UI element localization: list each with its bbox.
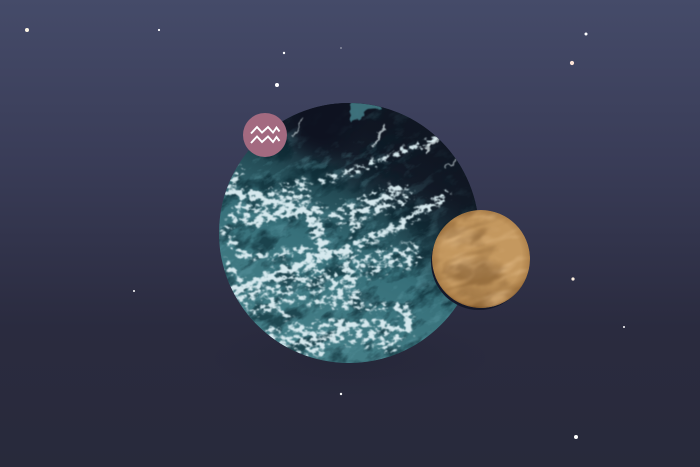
icon: aquarius waves [251, 127, 280, 143]
lacy foam [222, 140, 445, 358]
aquarius badge [243, 113, 287, 157]
wood planet [432, 210, 530, 308]
foam streaks [293, 119, 456, 168]
stars [25, 28, 625, 439]
ocean planet [219, 103, 477, 363]
foam patch at top of ocean planet [349, 103, 382, 122]
planet shadow [210, 318, 490, 398]
sparse foam fields [230, 190, 410, 340]
planet shadow on ocean [431, 214, 527, 310]
